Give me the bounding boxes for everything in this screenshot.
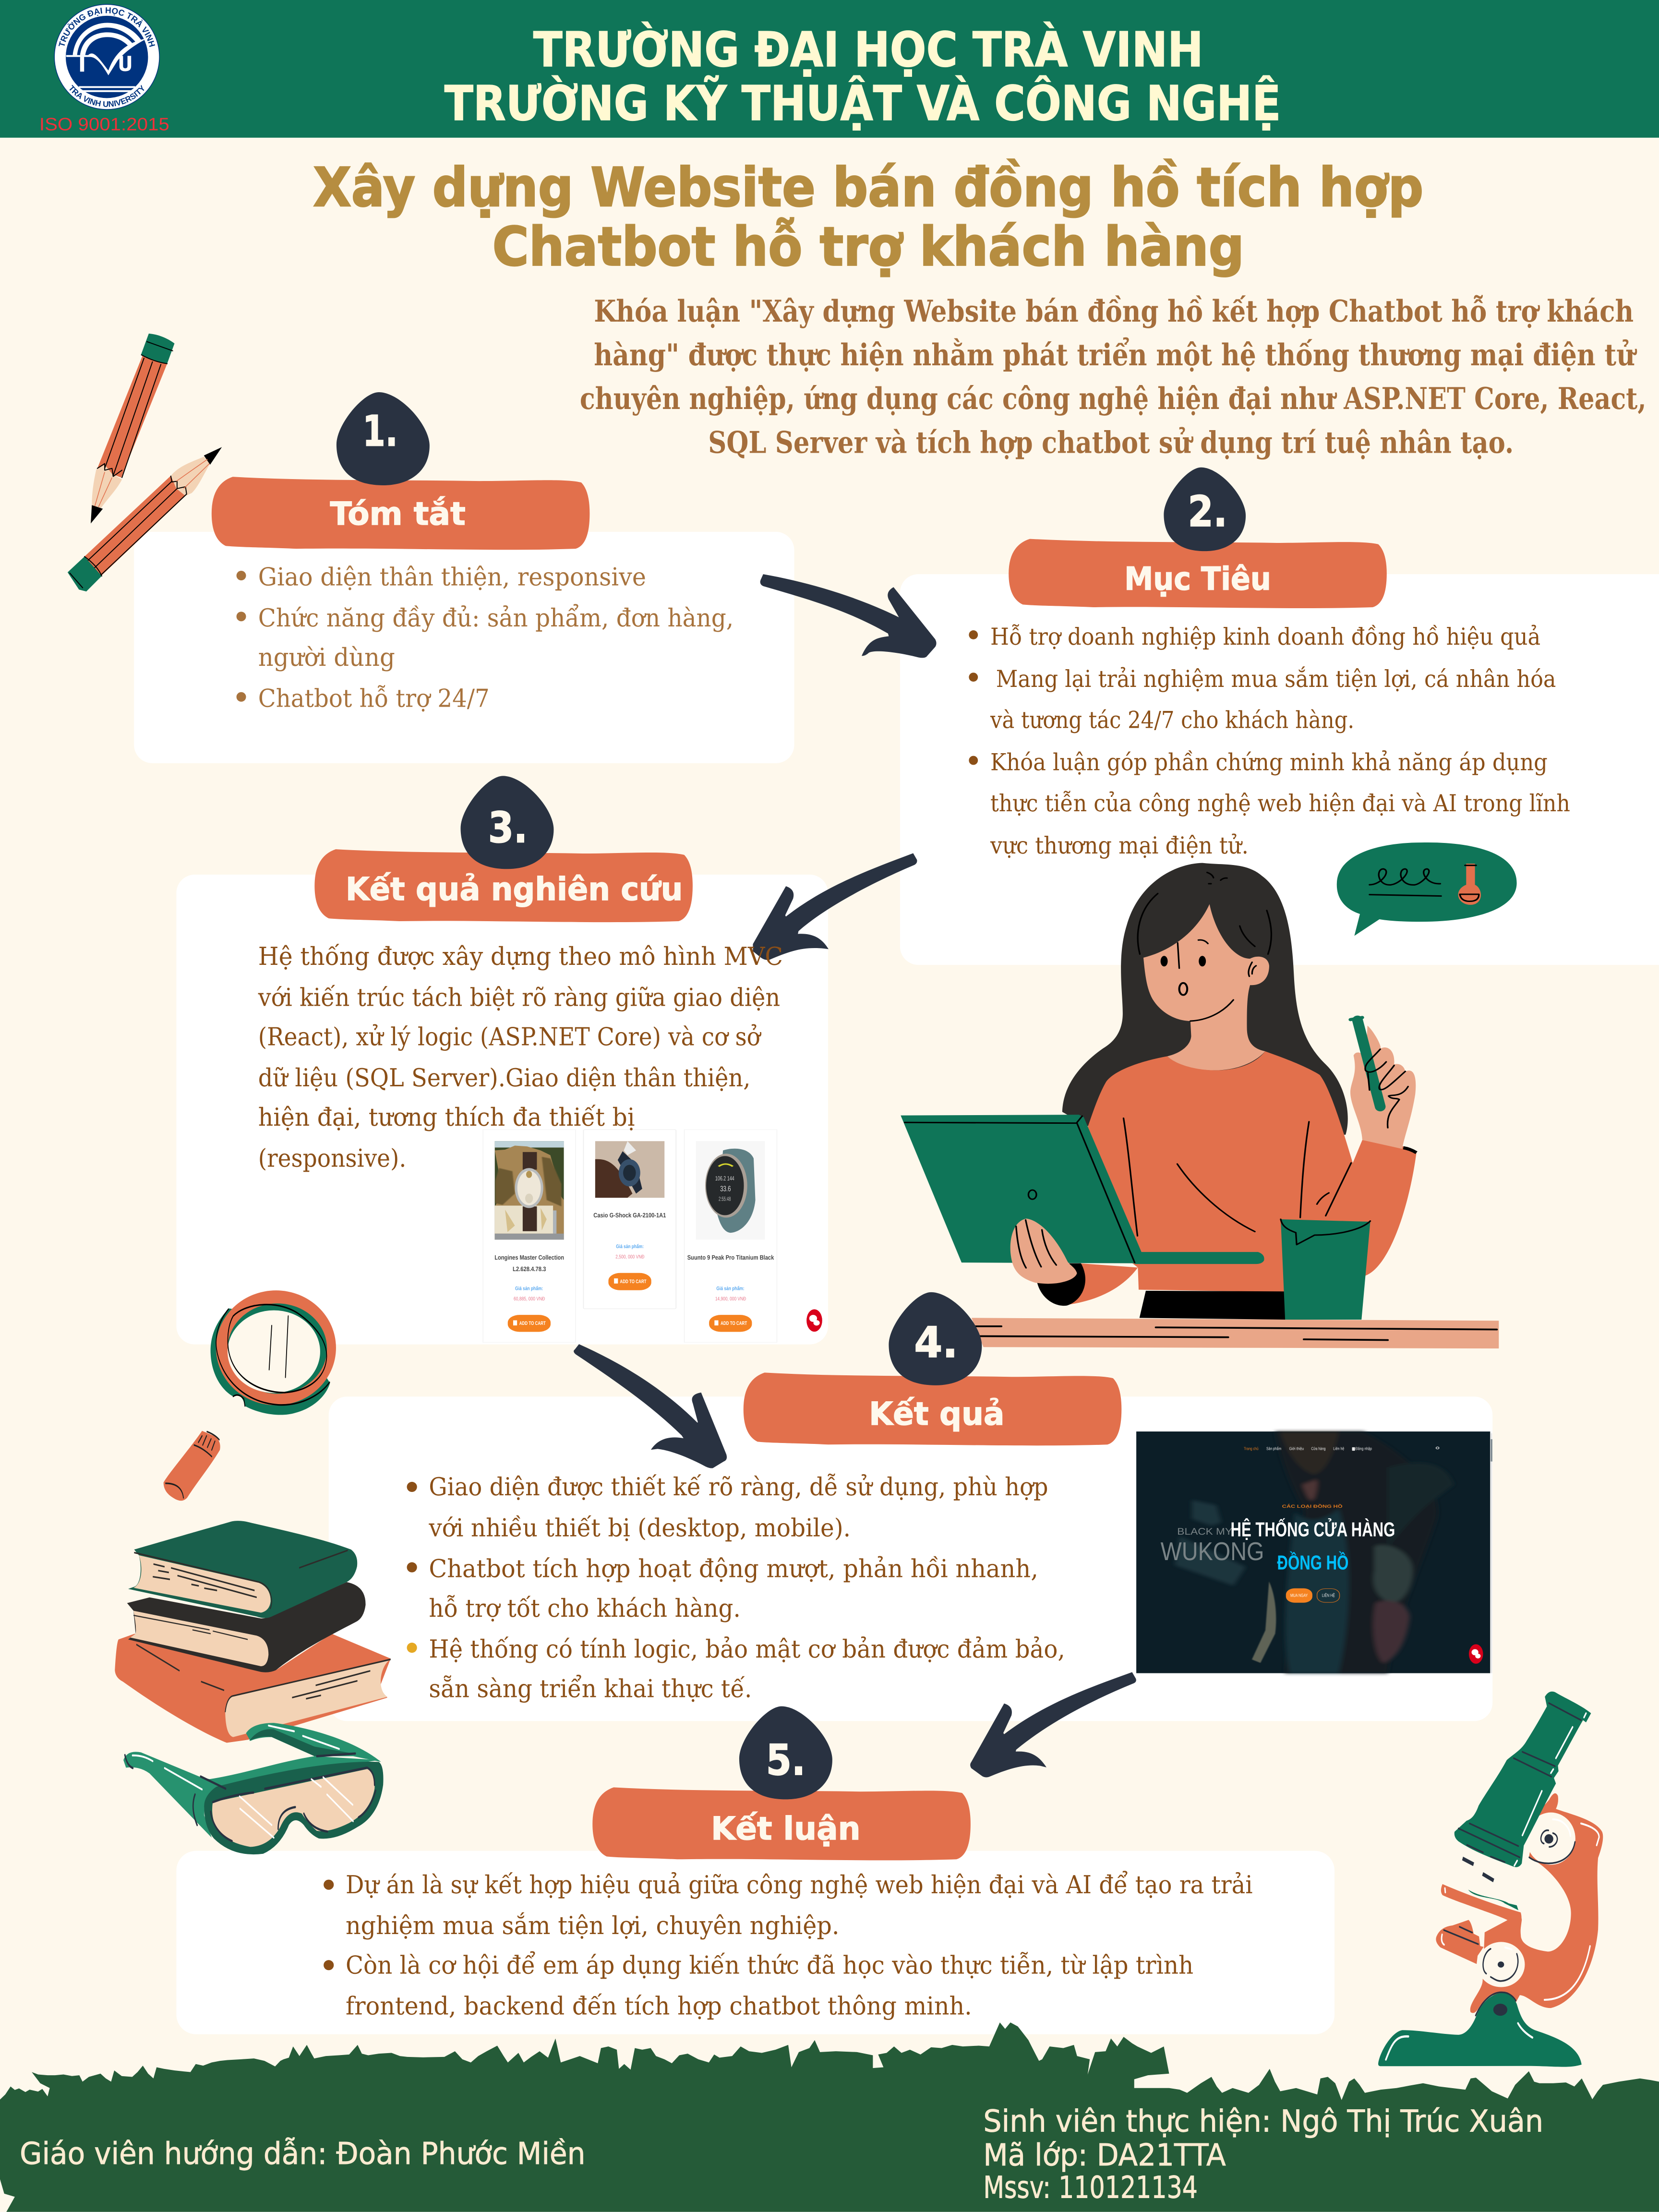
section 1 number: 1.	[362, 408, 398, 457]
arrow: tóm tắt to mục tiêu	[760, 574, 937, 658]
hero headline	[1161, 1503, 1395, 1574]
hair	[1062, 863, 1348, 1135]
student info: Mã lớp: DA21TTA	[983, 2139, 1226, 2174]
illustration: magnifier, books and goggles	[115, 1290, 391, 1854]
main title	[313, 156, 1423, 278]
product labels: Giá sản phẩm:	[616, 1243, 644, 1249]
panel: kết luận	[176, 1851, 1334, 2034]
table	[972, 1318, 1499, 1348]
supervisor text: Giáo viên hướng dẫn: Đoàn Phước Miền	[20, 2137, 586, 2173]
product labels: Suunto 9 Peak Pro Titanium Black	[687, 1254, 774, 1261]
list: kết quả: với nhiều thiết bị (desktop, mobile).	[428, 1515, 851, 1543]
watch photo: Casio	[595, 1141, 664, 1198]
right hand and test tube	[1350, 1018, 1417, 1153]
paragraph: kết quả nghiên cứu: dữ liệu (SQL Server).Giao diện thân thiện,	[258, 1065, 750, 1094]
paragraph: kết quả nghiên cứu: (React), xử lý logic (ASP.NET Core) và cơ sở	[258, 1024, 762, 1052]
section 3 number: 3.	[488, 804, 528, 854]
section 5 heading: Kết luận: Kết luận	[711, 1811, 861, 1848]
list: kết quả: Giao diện được thiết kế rõ ràng, dễ sử dụng, phù hợp	[429, 1473, 1048, 1503]
panel: kết quả	[329, 1396, 1492, 1721]
university logo: TRƯỜNG ĐẠI HỌC TRÀ VINH	[59, 7, 156, 47]
chat button	[1469, 1644, 1483, 1664]
paragraph: kết quả nghiên cứu	[257, 944, 783, 1174]
section 3 number	[461, 776, 553, 869]
main title: Chatbot hỗ trợ khách hàng	[493, 216, 1244, 278]
face details	[1138, 872, 1271, 1021]
hero background figure	[1175, 1431, 1454, 1673]
arrow: kết quả to kết luận	[970, 1672, 1136, 1778]
section 3 heading: Kết quả nghiên cứu	[314, 849, 693, 922]
product labels: 60,885, 000 VNĐ	[514, 1296, 545, 1301]
list: tóm tắt: người dùng	[258, 645, 395, 673]
list: kết quả: Hệ thống có tính logic, bảo mật cơ bản được đảm bảo,	[429, 1636, 1065, 1665]
hero buttons	[1286, 1588, 1340, 1603]
hero buttons: MUA NGAY	[1290, 1593, 1308, 1598]
product labels: L2.628.4.78.3	[513, 1265, 546, 1273]
watch photo: Suunto: 33.6	[720, 1185, 731, 1193]
icon: pencils	[68, 334, 222, 591]
illustration: woman with laptop	[901, 863, 1417, 1320]
add to cart buttons: ADD TO CART	[721, 1320, 747, 1326]
product labels: 2,500, 000 VNĐ	[615, 1254, 644, 1260]
section 1 heading: Tóm tắt: Tóm tắt	[330, 495, 466, 533]
section 5 number	[739, 1706, 832, 1799]
section 2 number: 2.	[1188, 488, 1227, 538]
list: kết luận: nghiệm mua sắm tiện lợi, chuyên nghiệp.	[346, 1911, 840, 1941]
list: mục tiêu: thực tiễn của công nghệ web hiện đại và AI trong lĩnh	[990, 790, 1571, 817]
hero nav: Trang chủ	[1244, 1446, 1259, 1451]
section 2 heading: Mục Tiêu	[1009, 539, 1387, 608]
hero nav: Cửa hàng	[1311, 1446, 1325, 1451]
list: tóm tắt: Giao diện thân thiện, responsive	[258, 565, 646, 592]
left hand	[1010, 1218, 1077, 1284]
green book	[128, 1521, 357, 1618]
hero nav: Đăng nhập	[1356, 1446, 1372, 1451]
intro paragraph	[580, 295, 1647, 461]
hero nav: Liên hệ	[1333, 1446, 1344, 1451]
section 1 heading: Tóm tắt	[212, 477, 589, 550]
section 4 number: 4.	[914, 1319, 958, 1369]
watch photo: Suunto: 106.2 144	[715, 1175, 734, 1182]
section 1 number	[337, 392, 430, 485]
header band	[0, 0, 1659, 138]
microscope tube	[1455, 1692, 1591, 1867]
watch photo: Longines	[495, 1141, 564, 1239]
website hero screenshot	[1136, 1431, 1492, 1673]
footer band	[0, 2022, 1659, 2212]
hero nav: Sản phẩm	[1266, 1446, 1281, 1451]
product screenshot	[483, 1130, 822, 1342]
list: tóm tắt: Chức năng đầy đủ: sản phẩm, đơn hàng,	[258, 604, 733, 634]
watch photo: Suunto: 2:55:48	[719, 1196, 731, 1202]
product labels: Casio G-Shock GA-2100-1A1	[593, 1212, 666, 1219]
product labels	[494, 1212, 774, 1301]
paragraph: kết quả nghiên cứu: với kiến trúc tách biệt rõ ràng giữa giao diện	[257, 985, 780, 1013]
books	[115, 1521, 391, 1743]
dark book	[127, 1582, 366, 1672]
list: mục tiêu: và tương tác 24/7 cho khách hàng.	[989, 707, 1354, 733]
paragraph: kết quả nghiên cứu: hiện đại, tương thích đa thiết bị	[258, 1105, 635, 1133]
orange book	[115, 1634, 391, 1743]
product labels: 14,900, 000 VNĐ	[715, 1296, 746, 1301]
header title: TRƯỜNG KỸ THUẬT VÀ CÔNG NGHỆ	[445, 75, 1281, 132]
section 4 number	[889, 1292, 982, 1385]
sweater	[1087, 1051, 1417, 1293]
hero buttons: LIÊN HỆ	[1322, 1593, 1335, 1598]
student info: Mssv: 110121134	[983, 2171, 1198, 2206]
magnifier	[211, 1290, 336, 1415]
list: kết quả: sẵn sàng triển khai thực tế.	[429, 1674, 752, 1704]
list: kết luận: Dự án là sự kết hợp hiệu quả giữa công nghệ web hiện đại và AI để tạo ra trải	[346, 1871, 1253, 1900]
product labels: Giá sản phẩm:	[716, 1286, 745, 1291]
hero headline: WUKONG	[1161, 1537, 1264, 1565]
watch photo: Suunto	[696, 1141, 765, 1239]
university logo: ISO 9001:2015	[39, 115, 169, 134]
hero nav	[1244, 1446, 1439, 1451]
paragraph: kết quả nghiên cứu: (responsive).	[258, 1145, 406, 1174]
student info	[983, 2105, 1543, 2206]
panel: tóm tắt	[134, 532, 794, 763]
university logo: TRA VINH UNIVERSITY	[69, 84, 144, 107]
hero headline: BLACK MY	[1177, 1526, 1232, 1537]
panel: mục tiêu	[900, 574, 1659, 965]
list: mục tiêu: Mang lại trải nghiệm mua sắm tiện lợi, cá nhân hóa	[996, 666, 1556, 693]
list: mục tiêu	[969, 624, 1571, 859]
list: mục tiêu: vực thương mại điện tử.	[989, 832, 1249, 859]
chat button	[806, 1309, 822, 1332]
list: tóm tắt: Chatbot hỗ trợ 24/7	[258, 684, 490, 714]
list: kết quả	[407, 1473, 1065, 1704]
microscope base	[1378, 1993, 1582, 2067]
section 2 number	[1164, 468, 1246, 551]
add to cart buttons: ADD TO CART	[519, 1320, 546, 1326]
hero headline: ĐỒNG HỒ	[1277, 1551, 1348, 1574]
list: kết luận	[324, 1871, 1253, 2021]
university logo	[39, 4, 169, 134]
list: kết luận: Còn là cơ hội để em áp dụng kiến thức đã học vào thực tiễn, từ lập trình	[346, 1951, 1193, 1981]
list: mục tiêu: Hỗ trợ doanh nghiệp kinh doanh đồng hồ hiệu quả	[990, 624, 1540, 650]
section 4 heading: Kết quả	[744, 1372, 1121, 1445]
pencil two	[68, 447, 222, 591]
cup	[1281, 1219, 1370, 1320]
list: kết quả: hỗ trợ tốt cho khách hàng.	[429, 1594, 741, 1624]
product labels: Longines Master Collection	[494, 1254, 564, 1261]
skirt	[1140, 1291, 1286, 1320]
face and neck	[1143, 904, 1269, 1070]
microscope stage	[1441, 1884, 1525, 1946]
section 2 heading: Mục Tiêu: Mục Tiêu	[1124, 562, 1271, 598]
section 4 heading: Kết quả: Kết quả	[869, 1396, 1004, 1433]
list: mục tiêu: Khóa luận góp phần chứng minh khả năng áp dụng	[990, 749, 1548, 776]
product labels: Giá sản phẩm:	[515, 1286, 543, 1291]
header title: TRƯỜNG ĐẠI HỌC TRÀ VINH	[533, 21, 1203, 79]
header title	[445, 21, 1281, 132]
list: kết luận: frontend, backend đến tích hợp chatbot thông minh.	[346, 1993, 972, 2021]
section 5 number: 5.	[766, 1737, 805, 1786]
laptop	[901, 1115, 1264, 1264]
illustration: microscope	[1378, 1692, 1603, 2067]
paragraph: kết quả nghiên cứu: Hệ thống được xây dựng theo mô hình MVC	[258, 944, 783, 972]
speech bubble	[1337, 842, 1517, 936]
pencil one	[91, 334, 174, 523]
arrow: mục tiêu to kết quả nghiên cứu	[753, 853, 917, 960]
magnifier handle	[164, 1431, 220, 1501]
section 3 heading: Kết quả nghiên cứu: Kết quả nghiên cứu	[346, 872, 683, 909]
intro paragraph: SQL Server và tích hợp chatbot sử dụng trí tuệ nhân tạo.	[708, 426, 1514, 461]
goggles	[123, 1723, 384, 1854]
hero headline: CÁC LOẠI ĐỒNG HỒ	[1282, 1503, 1343, 1509]
main title: Xây dựng Website bán đồng hồ tích hợp	[313, 156, 1423, 219]
hero nav: Giới thiệu	[1289, 1446, 1304, 1451]
hero headline: HỆ THỐNG CỬA HÀNG	[1231, 1518, 1395, 1541]
microscope arm	[1470, 1793, 1603, 2013]
list: tóm tắt	[237, 565, 733, 714]
list: kết quả: Chatbot tích hợp hoạt động mượt, phản hồi nhanh,	[429, 1556, 1038, 1584]
add to cart buttons	[508, 1273, 752, 1332]
section 5 heading: Kết luận	[592, 1787, 971, 1860]
add to cart buttons: ADD TO CART	[620, 1278, 647, 1284]
student info: Sinh viên thực hiện: Ngô Thị Trúc Xuân	[983, 2105, 1543, 2140]
panel: kết quả nghiên cứu	[176, 875, 828, 1345]
arrow: kết quả nghiên cứu to kết quả	[574, 1344, 727, 1468]
left sleeve	[1067, 1263, 1138, 1305]
